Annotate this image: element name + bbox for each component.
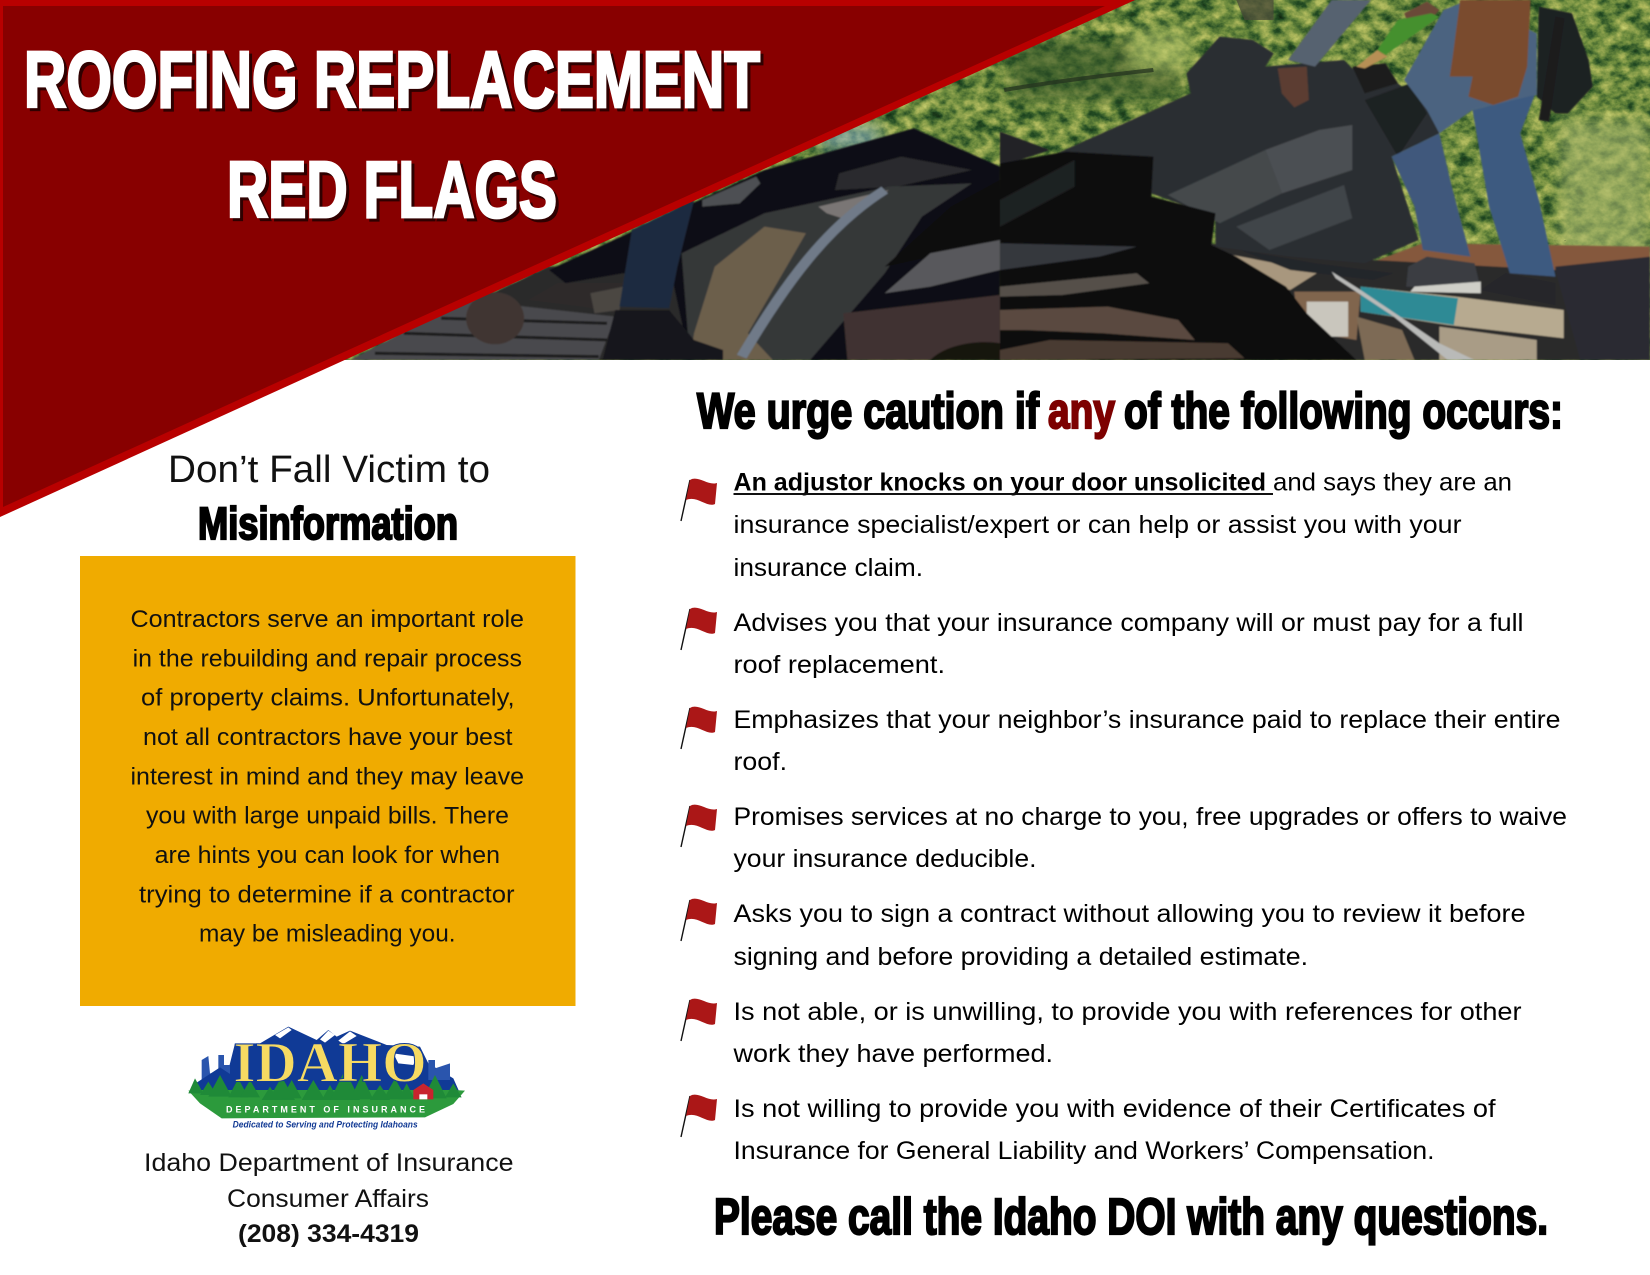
icon: red flag bbox=[681, 805, 717, 847]
item 1: insurance specialist/expert or can help or assist you with your bbox=[734, 511, 1462, 539]
item 3 bbox=[681, 706, 1560, 776]
item 4: Promises services at no charge to you, free upgrades or offers to waive bbox=[734, 803, 1567, 831]
item 1 bbox=[681, 468, 1512, 582]
heading: don't fall victim: Misinformation bbox=[198, 498, 458, 549]
title: RED FLAGS bbox=[227, 145, 557, 234]
item 3: roof. bbox=[734, 748, 787, 776]
panel text: not all contractors have your best bbox=[143, 724, 513, 751]
item 4 bbox=[681, 803, 1567, 873]
item 1: An adjustor knocks on your door unsolicited bbox=[734, 468, 1266, 496]
icon: red flag bbox=[681, 999, 717, 1041]
contact details: Idaho Department of Insurance bbox=[144, 1149, 514, 1177]
heading: don't fall victim bbox=[168, 449, 490, 549]
item 6: Is not able, or is unwilling, to provide you with references for other bbox=[734, 998, 1522, 1026]
right half of the scene bbox=[1000, 0, 1650, 360]
item 1: and says they are an bbox=[1273, 468, 1512, 496]
heading: don't fall victim: Don’t Fall Victim to bbox=[168, 449, 490, 491]
panel text: Contractors serve an important role bbox=[130, 606, 524, 633]
contact details: Consumer Affairs bbox=[227, 1185, 429, 1213]
item 7: Insurance for General Liability and Workers’ Compensation. bbox=[734, 1137, 1434, 1165]
panel text: may be misleading you. bbox=[199, 921, 456, 948]
item 5: Asks you to sign a contract without allowing you to review it before bbox=[734, 900, 1526, 928]
red flag list bbox=[681, 468, 1567, 1165]
red diagonal banner bbox=[0, 0, 1135, 517]
panel: contractors explanation bbox=[80, 556, 576, 1006]
logo: Idaho Department of Insurance bbox=[188, 1027, 465, 1130]
item 2: Advises you that your insurance company will or must pay for a full bbox=[734, 609, 1524, 637]
heading: we urge caution: We urge caution if bbox=[697, 383, 1039, 439]
icon: red flag bbox=[681, 608, 717, 650]
logo barn bbox=[413, 1083, 433, 1099]
item 4: your insurance deducible. bbox=[734, 845, 1036, 873]
logo: Idaho Department of Insurance: Dedicated to Serving and Protecting Idahoans bbox=[233, 1120, 418, 1130]
header photo: roofers removing shingles bbox=[344, 0, 1650, 360]
item 6 bbox=[681, 998, 1522, 1068]
item 5: signing and before providing a detailed estimate. bbox=[734, 943, 1308, 971]
item 6: work they have performed. bbox=[732, 1040, 1053, 1068]
panel text: in the rebuilding and repair process bbox=[133, 645, 522, 672]
panel text: interest in mind and they may leave bbox=[130, 763, 524, 790]
tree trunk and branch bbox=[1004, 0, 1274, 90]
panel text: you with large unpaid bills. There bbox=[146, 803, 509, 830]
panel text: of property claims. Unfortunately, bbox=[141, 685, 515, 712]
icon: red flag bbox=[681, 899, 717, 941]
title: ROOFING REPLACEMENT bbox=[24, 35, 760, 124]
panel text: trying to determine if a contractor bbox=[139, 881, 515, 908]
item 3: Emphasizes that your neighbor’s insurance paid to replace their entire bbox=[734, 706, 1560, 734]
panel text bbox=[130, 606, 524, 948]
item 1: insurance claim. bbox=[734, 554, 923, 582]
title bbox=[24, 35, 760, 234]
icon: red flag bbox=[681, 479, 717, 521]
panel text: are hints you can look for when bbox=[155, 842, 500, 869]
heading: we urge caution: any bbox=[1048, 383, 1115, 439]
heading: we urge caution bbox=[697, 383, 1563, 439]
contact details bbox=[144, 1149, 514, 1248]
logo wordmark: IDAHO bbox=[233, 1033, 427, 1095]
logo: Idaho Department of Insurance: DEPARTMENT OF INSURANCE bbox=[226, 1105, 425, 1115]
item 7 bbox=[681, 1095, 1496, 1165]
left half of the scene bbox=[350, 128, 1000, 360]
contact details: (208) 334-4319 bbox=[238, 1220, 419, 1248]
icon: red flag bbox=[681, 1095, 717, 1137]
icon: red flag bbox=[681, 707, 717, 749]
item 2 bbox=[681, 608, 1524, 679]
item 5 bbox=[681, 899, 1526, 971]
item 7: Is not willing to provide you with evidence of their Certificates of bbox=[734, 1095, 1496, 1123]
item 2: roof replacement. bbox=[734, 651, 945, 679]
